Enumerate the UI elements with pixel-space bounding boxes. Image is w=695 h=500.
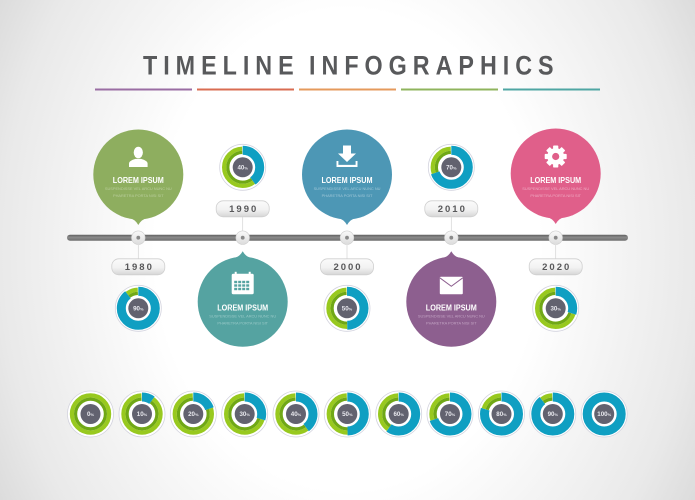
bubble: pink gear (511, 128, 601, 224)
donut: 90%: 90% (133, 305, 144, 312)
icon: person (129, 147, 148, 167)
year pill: 1980 (112, 259, 165, 275)
year pill: 1990 (216, 201, 269, 217)
timeline bar (67, 235, 628, 241)
bubble: pink gear: PHARETRA PORTA NISI SIT (530, 193, 582, 198)
bubble: purple mail: LOREM IPSUM (426, 303, 477, 312)
donut: 90%: 90% (548, 411, 558, 418)
donut: 50%: 50% (342, 305, 353, 312)
connector lines (138, 217, 556, 259)
donut: 50% (324, 391, 370, 437)
donut: 90% (530, 391, 576, 437)
bubble: blue download: LOREM IPSUM (322, 176, 373, 185)
donut: 30%: 30% (239, 411, 250, 418)
donut: 40% (273, 391, 319, 437)
year pill: 1980: 1980 (125, 262, 154, 273)
icon: gear (545, 146, 567, 168)
donut: 70% (427, 391, 473, 437)
donut: 0%: 0% (87, 411, 94, 418)
donut: 100% (581, 391, 627, 437)
bubble: green person: SUSPENDISSE VEL ARCU NUNC NU (105, 186, 172, 191)
title underlines (95, 88, 600, 90)
year pill: 2010 (425, 201, 478, 217)
title: TIMELINE INFOGRAPHICS (143, 51, 560, 81)
donut: 40% top: 40% (237, 165, 248, 172)
donut: 40%: 40% (291, 411, 302, 418)
timeline nodes (132, 231, 562, 244)
donut: 30%: 30% (550, 305, 561, 312)
donut: 80%: 80% (496, 411, 507, 418)
bubble: teal calendar: SUSPENDISSE VEL ARCU NUNC NU (209, 313, 276, 318)
donut: 10%: 10% (137, 411, 148, 418)
donut: 60% (376, 391, 422, 437)
bubble: pink gear: SUSPENDISSE VEL ARCU NUNC NU (522, 186, 589, 191)
bubble: blue download: SUSPENDISSE VEL ARCU NUNC NU (314, 186, 381, 191)
donut: 20% (170, 391, 216, 437)
year pill: 2020 (529, 259, 582, 275)
year pill: 2020: 2020 (542, 262, 571, 273)
bubble: green person (93, 130, 183, 225)
donut: 60%: 60% (393, 411, 404, 418)
donut: 30% (222, 391, 268, 437)
bubble: blue download (302, 130, 392, 225)
donut: 70%: 70% (445, 411, 456, 418)
year pill: 1990: 1990 (229, 204, 258, 215)
donut: 10% (119, 391, 165, 437)
donut: 0% (68, 391, 114, 437)
donut: 30% (533, 285, 579, 331)
bubble: pink gear: LOREM IPSUM (530, 176, 581, 185)
bubble: purple mail (406, 251, 496, 347)
donut: 90% (115, 285, 161, 331)
bubble: purple mail: SUSPENDISSE VEL ARCU NUNC NU (418, 313, 485, 318)
bubble: green person: LOREM IPSUM (113, 176, 164, 185)
bubble: green person: PHARETRA PORTA NISI SIT (113, 193, 164, 198)
bubble: blue download: PHARETRA PORTA NISI SIT (322, 193, 373, 198)
donut: 70% top (428, 144, 474, 190)
year pill: 2000: 2000 (333, 262, 363, 273)
bubble: teal calendar: PHARETRA PORTA NISI SIT (217, 320, 269, 325)
donut: 40% top (220, 144, 266, 190)
donut: 100%: 100% (597, 411, 612, 418)
donut: 50% (324, 285, 370, 331)
donut: 50%: 50% (342, 411, 353, 418)
year pill: 2010: 2010 (438, 204, 467, 215)
donut row (68, 391, 627, 437)
bubble: purple mail: PHARETRA PORTA NISI SIT (426, 320, 477, 325)
bubble: teal calendar: LOREM IPSUM (217, 303, 268, 312)
donut: 80% (478, 391, 524, 437)
icon: envelope (440, 277, 463, 294)
icon: download (336, 146, 358, 167)
icon: calendar (232, 272, 254, 294)
bubble: teal calendar (198, 251, 288, 347)
donut: 20%: 20% (188, 411, 199, 418)
donut: 70% top: 70% (446, 165, 457, 172)
year pill: 2000 (320, 259, 374, 275)
